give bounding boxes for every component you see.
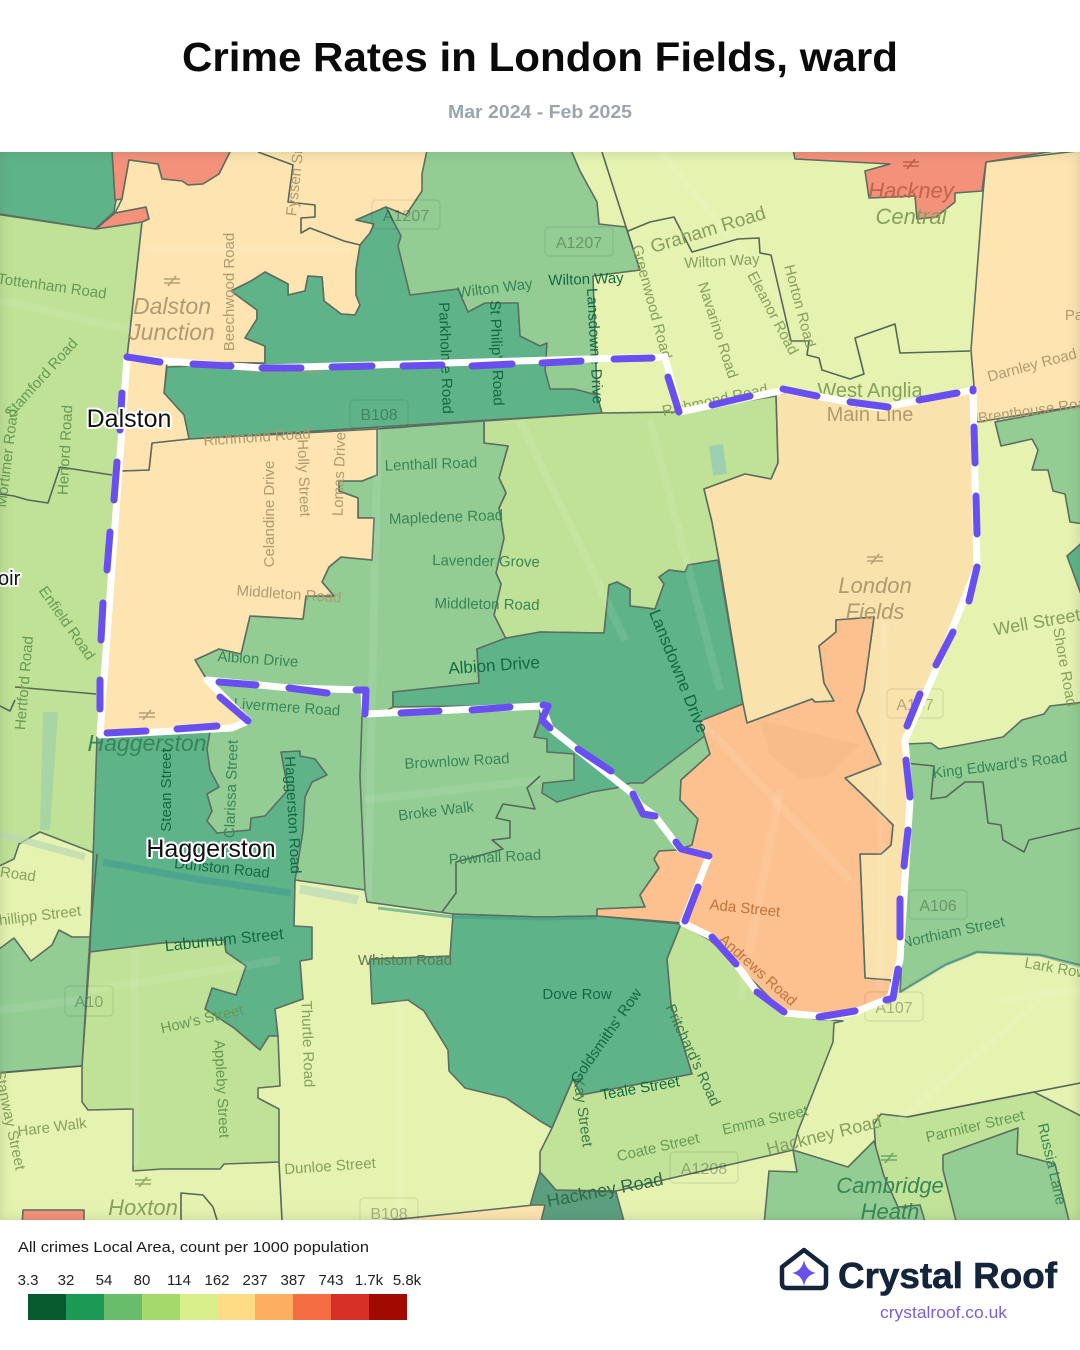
road labels on peach: Junction [128,319,215,345]
place labels with halo: Dalston [87,405,171,433]
road labels on dark green: Teale Street [599,1073,682,1104]
ward boundary: white dashed line [100,357,977,1017]
road labels on light green: Parmiter Street [924,1107,1027,1146]
legend tick labels: 5.8k [393,1272,422,1289]
road labels on mid green: Livermere Road [233,695,341,720]
road labels on mid green: Clarissa Street [221,739,242,838]
area: Bottom peach [344,1205,545,1225]
area: Dalston north strip peach [120,358,189,471]
logo: Crystal Roof [780,1248,1058,1296]
legend tick labels: 387 [280,1272,306,1289]
legend tick labels: 80 [134,1272,150,1289]
road labels on mid green: King Edward's Road [932,749,1068,782]
road labels on light green: How's Street [159,1002,246,1037]
road labels on peach: Lomas Drive [330,432,349,516]
road labels on yellow-green: Dunloe Street [284,1155,377,1178]
road labels on yellow-green: Navarino Road [694,280,741,380]
road labels on mid green [88,275,1069,1224]
road labels on light green: Stamford Road [1,335,81,422]
road labels on dark green: Lansdowne Drive [645,607,712,736]
road labels on peach: Main Line [827,404,913,426]
road labels on peach: Forest Road [239,360,321,377]
road labels on peach: Dalston [133,293,211,319]
road number badges: A107 [896,697,934,714]
boundary lines [0,152,1080,1220]
legend tick labels: 162 [204,1272,230,1289]
road number badges: B108 [360,407,398,424]
legend tick labels: 743 [318,1272,344,1289]
road labels on yellow-green: Shore Road [1049,626,1080,708]
road labels on mid green: Pownall Road [448,847,542,868]
road labels on light green: Pritchard's Road [662,1002,724,1109]
area: Dalston peach [115,150,427,363]
area: King Edward's mid green [900,702,1080,992]
areas: crime-rate polygons [0,150,1080,1225]
road labels on dark green: Haggerston Road [281,756,304,874]
road labels on dark green: Wilton Way [548,270,624,289]
title: Crime Rates in London Fields, ward [182,34,898,80]
road labels on dark green: Laburnum Street [164,926,285,955]
legend swatches [28,1294,407,1320]
area: Parmiter light green [874,1092,1080,1225]
area: Brenthouse mid green [995,405,1080,524]
road labels on yellow-green: West Anglia [817,380,923,402]
road labels on yellow-green: Richmond Road [661,381,769,420]
road number badges: A1207 [383,208,429,225]
road number badges: A10 [75,994,103,1011]
road labels on yellow-green: Hoxton [108,1195,178,1220]
legend tick labels: 1.7k [355,1272,384,1289]
icons: railway stations [135,159,919,1187]
legend: colour scale [18,1272,422,1320]
road labels on mid green: Mapledene Road [389,507,503,528]
area: Dove Row dark green [370,914,692,1128]
subtitle: date range: Mar 2024 - Feb 2025 [448,102,632,122]
legend tick labels: 32 [58,1272,74,1289]
road labels on light green: Hackney Road [545,1169,665,1211]
road labels on light green: Hertford Road [12,635,37,731]
area: salmon north of Dalston [112,150,231,200]
legend tick labels: 54 [96,1272,112,1289]
road labels on yellow-green: Greenwood Road [628,243,675,361]
area: Hackney Road dark patch [525,1172,625,1225]
road labels on dark green: Stean Street [158,747,175,832]
road labels on yellow-green: Central [876,204,948,229]
road labels on mid green: Albion Drive [217,648,299,671]
road labels on peach: Holly Street [294,439,313,518]
road labels on orange: Ada Street [709,896,782,921]
road labels on mid green: Northiam Street [900,913,1007,952]
area: Pritchard's light green [540,924,843,1191]
road labels on yellow-green: Wilton Way [684,251,761,272]
road labels on dark green: Parkholme Road [435,302,456,414]
area: Bottom-left salmon [22,1210,84,1225]
road labels on dark green: Lansdowne Drive [583,288,606,404]
area: Cambridge Heath mid green [764,1141,926,1225]
area: salmon sliver [96,207,149,229]
road labels on orange: Hackney [868,178,956,203]
choropleth map [0,152,1080,1220]
area: Hoxton light green [82,940,280,1171]
road labels on yellow-green: Horton Road [780,263,819,349]
ward boundary: purple dashes [100,357,977,1017]
road labels on yellow-green: Road [0,864,37,885]
road labels on dark green: Dove Row [542,986,612,1003]
road labels on mid green: Lenthall Road [384,454,478,475]
area: Russia Lane mid green [943,1128,1070,1225]
legend: title: All crimes Local Area, count per 1000 population [18,1239,369,1256]
area: Albion dark green [393,560,743,802]
road labels on dark green [158,270,712,1104]
legend tick labels: 114 [167,1272,191,1289]
area: Dalston south peach [100,429,377,735]
area: London Fields orange [597,617,893,1017]
road labels on mid green: Cambridge [836,1173,944,1198]
road labels on light green: Kay Street [569,1076,596,1149]
road labels on dark green: Goldsmiths' Row [567,985,646,1087]
road labels on yellow-green: Hare Walk [17,1115,88,1140]
area: Haggerston dark green [90,732,327,1050]
area: central light green [484,396,778,639]
place labels with halo [0,405,276,863]
road labels on dark green: Albion Drive [448,653,540,678]
road labels on peach: Celandine Drive [261,461,278,567]
road labels on mid green: Haggerston [88,730,206,756]
area: Hackney Central salmon [793,150,1060,219]
wordmark: Crystal Roof [838,1255,1058,1296]
road labels on mid green: Russia Lane [1034,1122,1069,1207]
road labels on peach: London [838,573,912,598]
area: Brownlow mid green [360,706,710,917]
road number badges: A107 [875,1000,913,1017]
road labels on peach: Beechwood Road [221,233,238,351]
road labels on peach: Darnley Road [986,345,1079,386]
road labels on yellow-green: Thurtle Road [297,1000,318,1088]
area: east edge dark green [1067,540,1080,605]
road labels on light green [0,270,1027,1211]
road labels on light green: Emma Street [721,1102,810,1139]
legend tick labels [18,1272,422,1289]
road labels on dark green: Duriston Road [173,855,271,882]
road labels on light green: Coate Street [615,1130,702,1165]
road labels on peach: Richmond Road [203,425,311,450]
area: west light green [0,214,142,868]
legend tick labels: 237 [242,1272,268,1289]
area: Lenthall mid green [97,421,508,890]
road labels on yellow-green: Graham Road [648,203,768,258]
road labels on dark green: St Philip's Road [486,300,507,406]
road network overlay [0,150,1080,1215]
road labels on mid green: Brownlow Road [404,750,510,773]
road labels on peach [128,122,1080,624]
road labels on orange: Andrews Road [715,931,800,1010]
road labels on mid green: Broke Walk [397,798,475,825]
website link: crystalroof.co.uk [880,1303,1008,1322]
area: north mid green [356,150,640,400]
road labels on yellow-green [0,203,1080,1220]
area: west mid green [0,930,90,1073]
area: north-east peach [971,150,1080,422]
road number badges [65,200,967,1227]
place labels with halo: Haggerston [146,835,276,863]
road labels on yellow-green: Whiston Road [358,952,452,969]
canal and park features [0,444,1080,992]
icon: house with star [782,1250,826,1288]
road labels on light green: Enfield Road [35,583,98,663]
road labels on peach: Middleton Road [236,582,342,607]
road labels on yellow-green: Well Street [992,605,1080,639]
road labels on orange [709,178,956,1010]
road labels on light green: Herford Road [55,405,76,495]
legend tick labels: 3.3 [18,1272,38,1289]
road number badges: A1207 [556,235,602,252]
road labels on yellow-green: Hackney Road [764,1111,884,1159]
road number badges: A1208 [681,1161,727,1178]
area: top-left dark green [0,150,116,229]
road labels on yellow-green: Eleanor Road [744,269,802,358]
road labels on mid green: Lavender Grove [432,552,540,571]
road labels on peach: Fields [846,599,904,624]
area: London Fields peach [704,390,977,998]
road labels on mid green: Middleton Road [434,595,540,614]
area: Wilton Way dark green [164,207,602,439]
road labels on mid green: Wilton Way [457,275,534,302]
road number badges: A106 [919,898,957,915]
road labels on light green: Appleby Street [210,1039,233,1139]
